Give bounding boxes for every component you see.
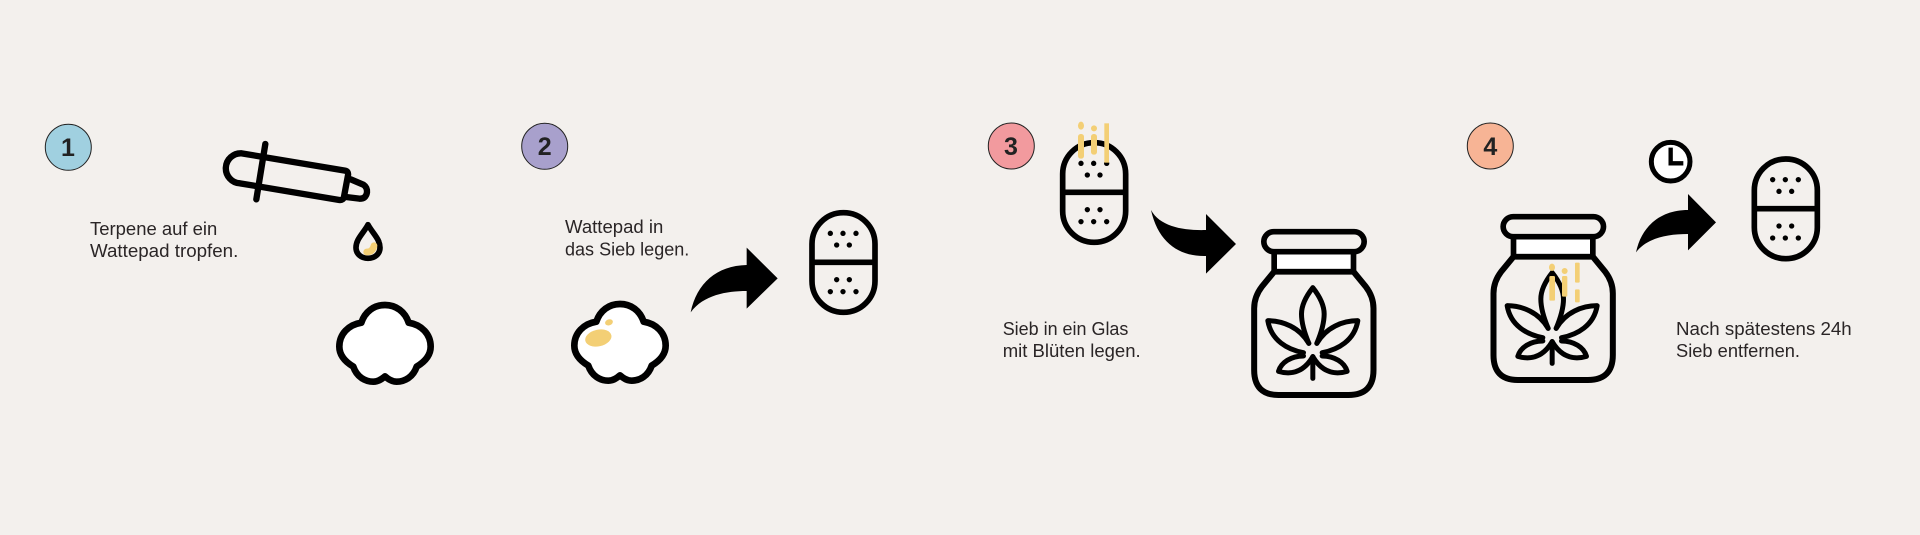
instruction text step 2: Wattepad in [565,216,663,237]
instruction text step 4 [1676,318,1852,361]
panel: step 4 [1467,123,1852,380]
panel: step 2 [522,123,875,381]
instruction text step 2: das Sieb legen. [565,238,689,260]
icon: jar with sieve terpene traces [1493,217,1613,380]
arrow: sieve to jar [1151,210,1236,274]
panel: step 1 [45,124,431,382]
icon: dropper [226,144,367,200]
icon: cotton pad [339,305,431,382]
step number badge 4 [1467,123,1513,169]
step number badge 2 [522,123,568,169]
step number badge 1 [45,124,91,170]
icon: terpene drop [356,225,380,258]
instruction text step 3: Sieb in ein Glas [1003,318,1128,339]
arrow: cotton pad to sieve [691,248,778,312]
step number badge 3 [988,123,1034,169]
instruction text step 3 [1003,318,1141,361]
icon: cotton pad with terpene stain [574,304,666,381]
icon: clock [1651,142,1690,181]
step number badge 1: 1 [61,134,75,162]
icon: jar with cannabis flower [1254,232,1373,395]
step number badge 4: 4 [1483,133,1497,161]
instruction text step 1: Terpene auf ein [90,218,217,239]
step number badge 3: 3 [1004,133,1018,161]
instruction text step 4: Nach spätestens 24h [1676,318,1852,339]
arrow: jar to sieve [1636,194,1716,252]
icon: sieve [812,213,875,312]
step number badge 2: 2 [538,133,552,161]
instruction text step 3: mit Blüten legen. [1003,340,1141,361]
icon: sieve with falling terpene [1063,122,1126,242]
instruction text step 4: Sieb entfernen. [1676,340,1800,361]
icon: sieve removed [1754,159,1817,259]
instruction text step 1: Wattepad tropfen. [90,240,238,261]
instruction text step 2 [565,216,689,260]
panel: step 3 [988,122,1373,395]
instruction text step 1 [90,218,238,261]
